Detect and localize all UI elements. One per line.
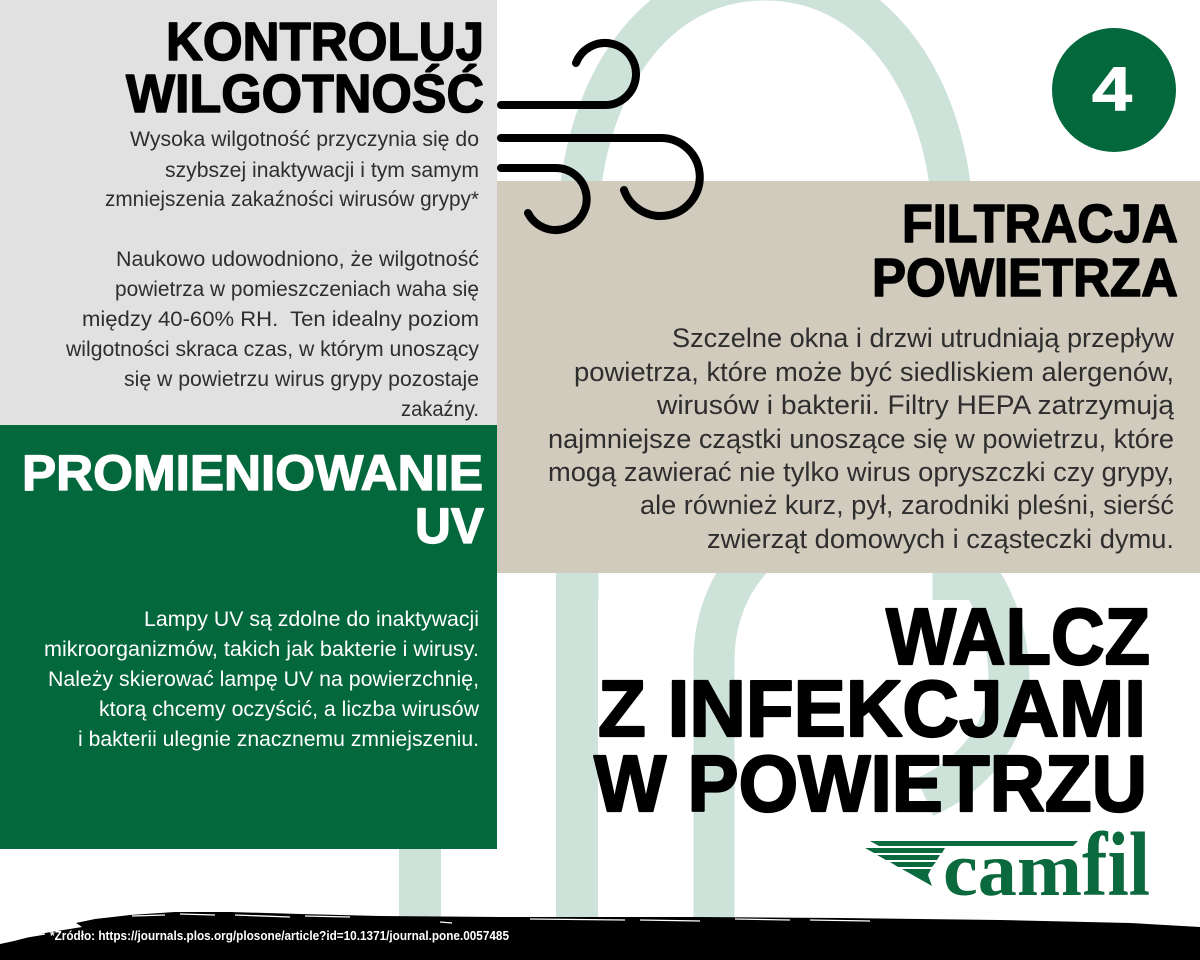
text block: UV description [44, 608, 480, 751]
text block: UV description: Należy skierować lampę UV na powierzchnię, [48, 668, 479, 691]
text block: filtration description: Szczelne okna i drzwi utrudniają przepływ [672, 323, 1174, 353]
text block: humidity description: wilgotności skraca czas, w którym unoszący [65, 338, 479, 361]
panel: promieniowanie UV [0, 425, 497, 849]
logo wordmark: fil [1082, 815, 1150, 916]
text block: humidity description: powietrza w pomieszczeniach waha się [115, 278, 479, 301]
logo wordmark [943, 815, 1150, 916]
main title: W POWIETRZU [594, 739, 1147, 828]
heading: kontroluj wilgotność: WILGOTNOŚĆ [126, 64, 484, 124]
badge: number 4: 4 [1092, 55, 1133, 124]
text block: humidity description: zmniejszenia zakaźności wirusów grypy* [105, 188, 479, 211]
text block: humidity description: się w powietrzu wirus grypy pozostaje [124, 368, 479, 391]
text block: filtration description: mogą zawierać nie tylko wirus opryszczki czy grypy, [548, 457, 1174, 487]
heading: filtracja powietrza: FILTRACJA [902, 194, 1178, 254]
text block: UV description: mikroorganizmów, takich jak bakterie i wirusy. [44, 638, 479, 661]
text block: humidity description: Naukowo udowodniono, że wilgotność [116, 248, 479, 271]
logo wing [865, 841, 1078, 886]
source footnote: *Źródło: https://journals.plos.org/plosone/article?id=10.1371/journal.pone.0057485 [50, 928, 509, 943]
heading: promieniowanie UV: PROMIENIOWANIE [22, 445, 483, 501]
logo: camfil [865, 815, 1150, 916]
main title: Z INFEKCJAMI [598, 664, 1146, 753]
background arch shapes [399, 0, 1009, 930]
main title: WALCZ [886, 592, 1150, 681]
text block: filtration description: zwierząt domowych i cząsteczki dymu. [707, 524, 1174, 554]
text block: humidity description: szybszej inaktywacji i tym samym [165, 159, 479, 182]
logo wordmark: cam [943, 828, 1082, 912]
panel: filtracja powietrza [497, 181, 1200, 573]
text block: filtration description: powietrza, które może być siedliskiem alergenów, [574, 357, 1174, 387]
brush footer band [0, 912, 1200, 960]
text block: filtration description: ale również kurz, pył, zarodniki pleśni, sierść [640, 490, 1174, 520]
heading: promieniowanie UV: UV [415, 498, 485, 554]
panel: kontroluj wilgotność [0, 0, 497, 425]
heading: promieniowanie UV [22, 445, 485, 554]
heading: kontroluj wilgotność: KONTROLUJ [166, 12, 484, 72]
badge: number 4 [1052, 28, 1176, 152]
heading: kontroluj wilgotność [126, 12, 484, 124]
text block: filtration description: wirusów i bakterii. Filtry HEPA zatrzymują [656, 390, 1175, 420]
text block: UV description: i bakterii ulegnie znacznemu zmniejszeniu. [78, 728, 479, 751]
text block: UV description: Lampy UV są zdolne do inaktywacji [144, 608, 479, 631]
text block: filtration description: najmniejsze cząstki unoszące się w powietrzu, które [548, 424, 1174, 454]
icon: wind [501, 43, 700, 230]
text block: humidity description: zakaźny. [401, 398, 479, 421]
main title [594, 592, 1150, 828]
heading: filtracja powietrza [872, 194, 1178, 308]
text block: filtration description [548, 323, 1175, 554]
text block: humidity description: między 40-60% RH. Ten idealny poziom [82, 308, 479, 331]
text block: UV description: ktorą chcemy oczyścić, a liczba wirusów [99, 698, 480, 721]
text block: humidity description [65, 128, 479, 421]
text block: humidity description: Wysoka wilgotność przyczynia się do [130, 128, 479, 151]
heading: filtracja powietrza: POWIETRZA [872, 248, 1178, 308]
